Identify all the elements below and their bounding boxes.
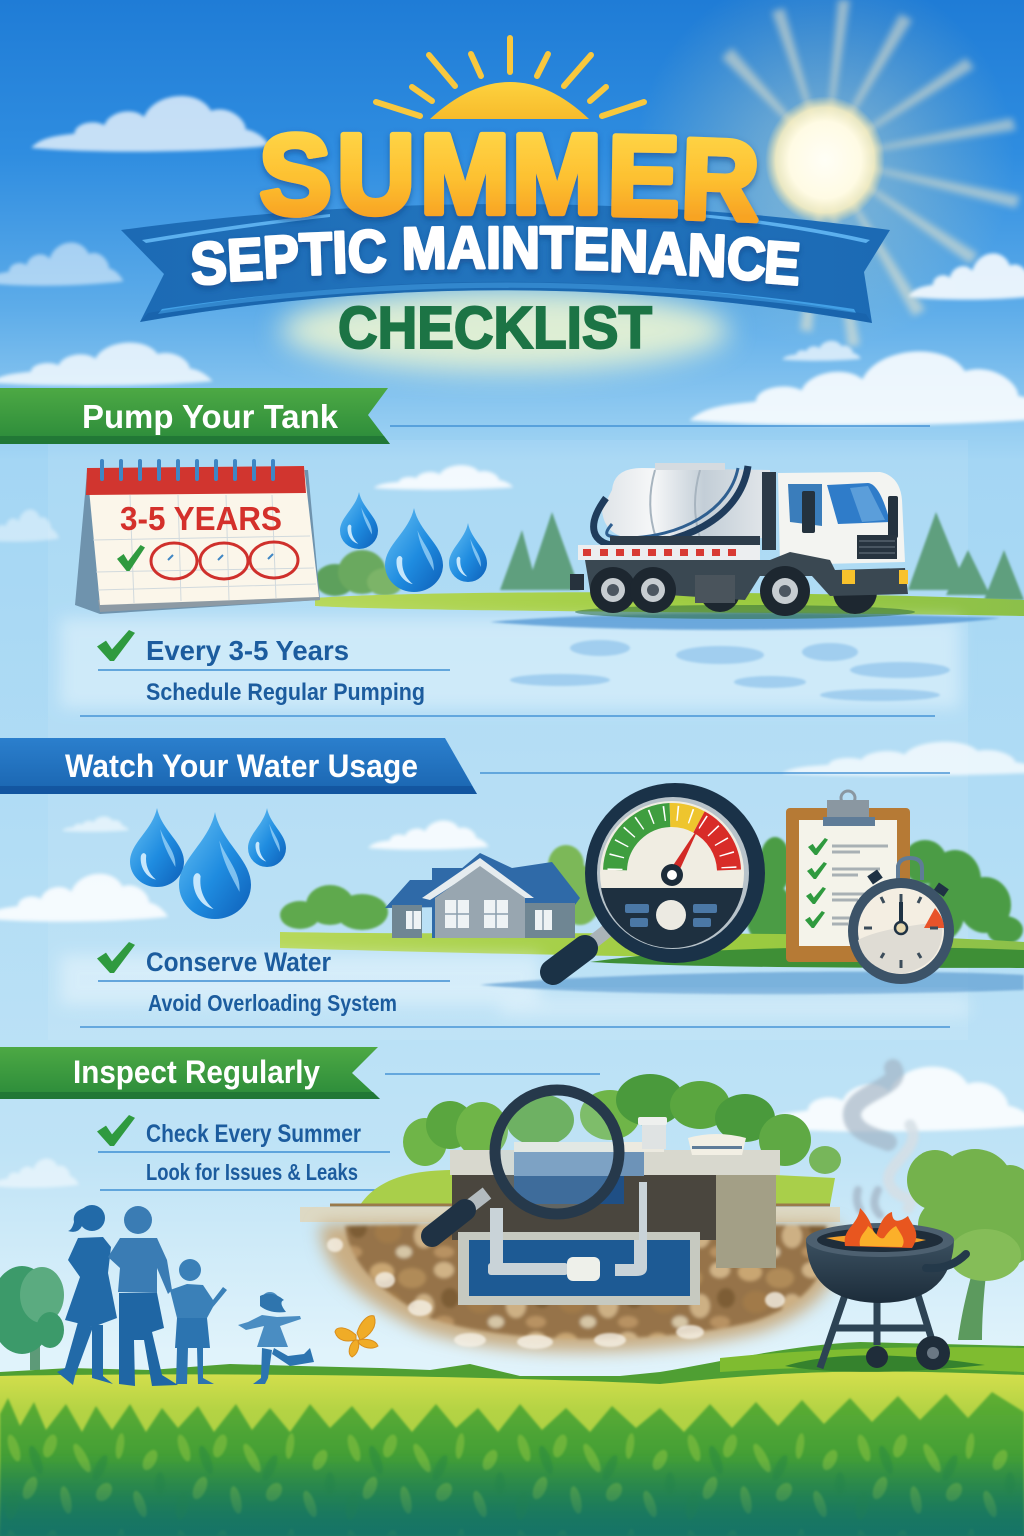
title: CHECKLIST: CHECKLIST xyxy=(338,295,652,361)
icon: calendar 3-5 years xyxy=(75,461,320,614)
title banner xyxy=(121,204,890,323)
grass hill and foreground xyxy=(0,1342,1024,1536)
clouds xyxy=(0,96,1024,1188)
icon: three water drops xyxy=(340,492,487,592)
title sunburst xyxy=(376,38,644,119)
section 1 scenery: trees and ground xyxy=(60,512,1024,708)
sun with rays xyxy=(635,0,1020,348)
icon: barbecue grill xyxy=(806,1208,966,1370)
section 3 checklist text: Look for Issues & Leaks xyxy=(146,1159,358,1185)
section 1 checklist text xyxy=(80,630,935,716)
silhouette: boy xyxy=(170,1259,227,1384)
section 3 checklist text: Check Every Summer xyxy=(146,1120,361,1148)
section 2 checklist text: Conserve Water xyxy=(146,947,331,977)
icon: stopwatch xyxy=(848,858,954,984)
section 1 heading ribbon xyxy=(0,388,390,444)
content panel wash xyxy=(48,440,968,1040)
section 2 checklist text xyxy=(80,942,950,1027)
section 3 soil cross-section xyxy=(320,1222,841,1352)
section 2 scenery: bushes and ground xyxy=(60,837,1024,1016)
icon: septic tank with risers xyxy=(450,1117,780,1305)
silhouette: running girl xyxy=(238,1292,314,1384)
right tree xyxy=(907,1149,1024,1340)
section 3 scenery: bushes behind tank xyxy=(300,1074,841,1222)
silhouette: father xyxy=(108,1206,178,1386)
section 2 heading ribbon xyxy=(0,738,477,794)
section 3 heading ribbon: Inspect Regularly xyxy=(73,1054,320,1090)
icon: septic pump truck xyxy=(570,463,915,619)
silhouette: family xyxy=(57,1205,314,1386)
icon: butterfly xyxy=(335,1316,378,1357)
icon: water drops large xyxy=(130,808,286,919)
icon: smoke xyxy=(852,1068,913,1215)
section 1 checklist text: Every 3-5 Years xyxy=(146,635,349,666)
title: SUMMER: SUMMER xyxy=(258,112,761,245)
section 2 heading ribbon: Watch Your Water Usage xyxy=(65,748,418,784)
icon: house xyxy=(385,853,580,938)
icon: clipboard xyxy=(786,791,910,962)
icon: calendar 3-5 years: 3-5 YEARS xyxy=(120,500,282,537)
section 2 checklist text: Avoid Overloading System xyxy=(148,990,397,1016)
checklist glow xyxy=(280,288,730,372)
silhouette: mother xyxy=(57,1205,117,1385)
left tree xyxy=(0,1266,64,1370)
section 3 heading ribbon xyxy=(0,1047,380,1099)
section 1 checklist text: Schedule Regular Pumping xyxy=(146,679,425,706)
section 3 checklist text xyxy=(97,1115,390,1190)
icon: magnifier over tank xyxy=(432,1090,619,1236)
icon: magnifier with water gauge xyxy=(553,783,765,972)
section 1 heading ribbon: Pump Your Tank xyxy=(82,398,339,435)
title: SEPTIC MAINTENANCE: SEPTIC MAINTENANCE xyxy=(189,216,802,298)
